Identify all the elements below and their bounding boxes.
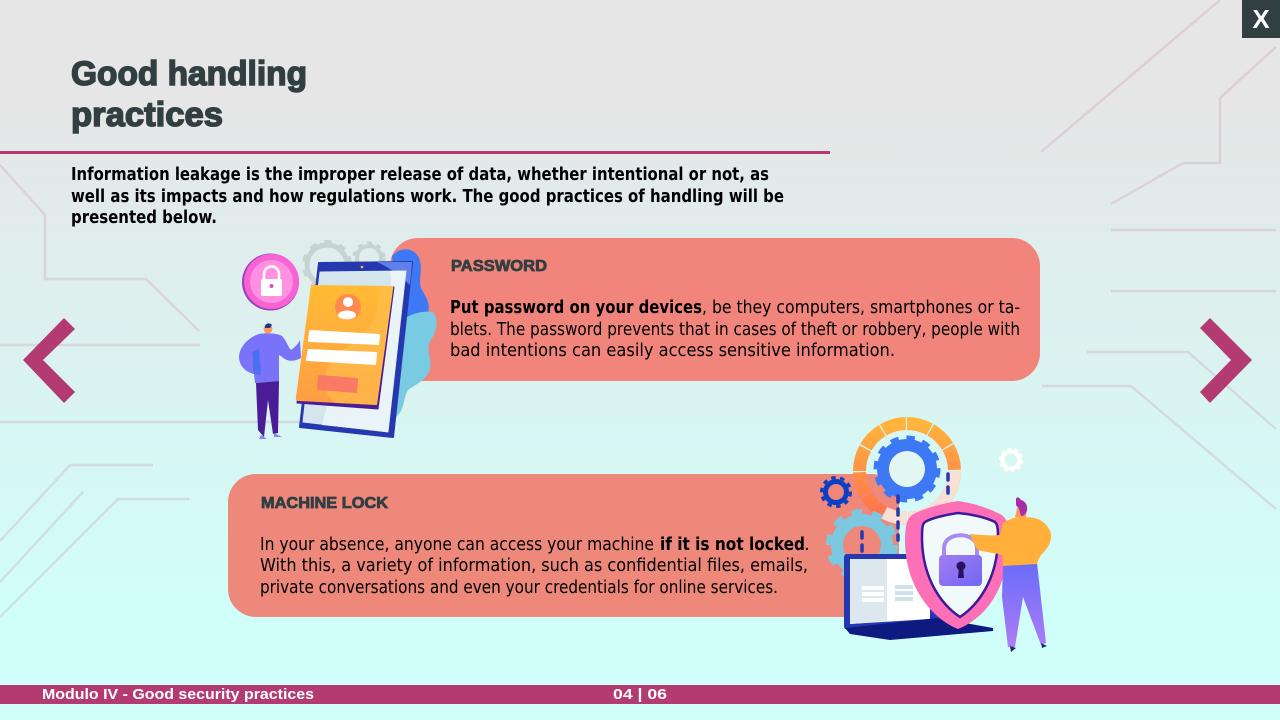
shield (905, 501, 1009, 629)
close button (1242, 0, 1280, 38)
title (71, 55, 307, 134)
intro text (71, 164, 784, 228)
login card (296, 285, 394, 409)
machine lock body text: if it is not locked (660, 534, 805, 555)
intro text: well as its impacts and how regulations work. The good practices of handling will be (71, 186, 784, 207)
icon: pink padlock badge (242, 254, 299, 310)
icon: teal gear (829, 512, 895, 578)
machine lock body text (260, 534, 810, 598)
password body text: bad intentions can easily access sensitive information. (450, 340, 895, 361)
input fields (306, 330, 380, 365)
title divider (0, 151, 830, 154)
machine lock body text: With this, a variety of information, such as confidential files, emails, (260, 555, 808, 576)
machine lock body text: private conversations and even your credentials for online services. (260, 577, 778, 598)
right arrow (1200, 318, 1252, 403)
person (239, 323, 301, 439)
icon: padlock (939, 535, 982, 586)
password body text: blets. The password prevents that in cases of theft or robbery, people with (450, 319, 1020, 340)
panel: machine lock (228, 474, 899, 617)
blue leaf (392, 249, 429, 323)
module label: Modulo IV - Good security practices (42, 686, 314, 703)
password body text: , be they computers, smartphones or ta- (702, 297, 1020, 318)
intro text: presented below. (71, 207, 217, 228)
icon: grey gears (304, 242, 384, 288)
laptop (844, 554, 993, 640)
illustration: person with shield and laptop (822, 424, 1051, 652)
page number: 04 | 06 (613, 686, 667, 703)
panel: password (390, 238, 1040, 381)
intro text: Information leakage is the improper release of data, whether intentional or not, as (71, 164, 769, 185)
footer bar (0, 685, 1280, 704)
teal leaf (386, 312, 437, 417)
icon: navy gear (822, 478, 850, 506)
avatar (335, 294, 361, 320)
title: Good handling (71, 55, 307, 93)
phone (300, 262, 412, 437)
heading: password: PASSWORD (451, 258, 547, 275)
illustration: person with phone login (239, 242, 437, 439)
left arrow (23, 318, 75, 403)
heading: machine lock: MACHINE LOCK (261, 495, 388, 512)
password body text: Put password on your devices (450, 297, 702, 318)
dashed connectors (862, 474, 948, 556)
submit button (317, 375, 358, 393)
icon: white gear (1000, 449, 1022, 471)
person (970, 497, 1051, 652)
icon: blue gear (876, 438, 938, 500)
close button: X (1252, 4, 1270, 34)
machine lock body text: . (804, 534, 810, 555)
segmented ring (860, 424, 954, 518)
title: practices (71, 96, 223, 134)
password body text (450, 297, 1020, 361)
machine lock body text: In your absence, anyone can access your machine (260, 534, 654, 555)
